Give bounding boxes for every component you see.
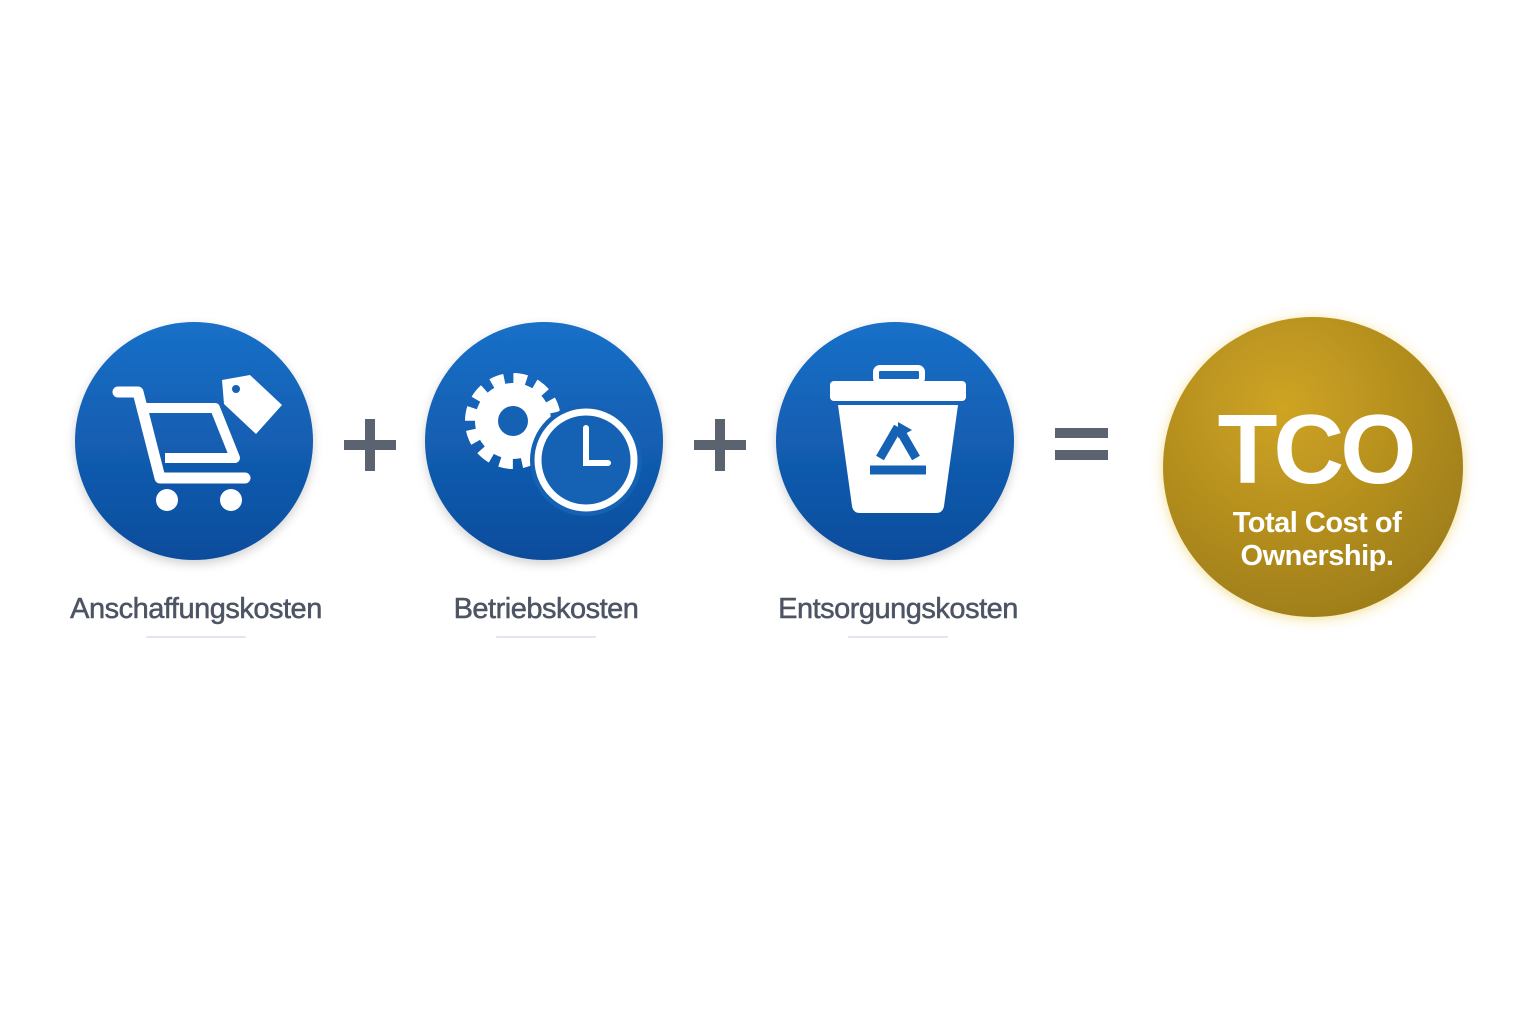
icon: recycle bin circle [776,322,1014,560]
icon: gear and clock circle [425,322,663,560]
TCO circle: Ownership. [1241,540,1393,572]
TCO circle: TCO [1218,394,1413,504]
label: Anschaffungskosten: Anschaffungskosten [70,593,322,625]
label: Entsorgungskosten: Entsorgungskosten [778,593,1018,625]
label: Betriebskosten: Betriebskosten [454,593,638,625]
equals [1055,428,1108,460]
icon: shopping cart circle [75,322,313,560]
TCO circle [1163,317,1463,617]
TCO circle: Total Cost of [1233,507,1402,539]
plus 2 [694,419,746,471]
plus 1 [344,419,396,471]
